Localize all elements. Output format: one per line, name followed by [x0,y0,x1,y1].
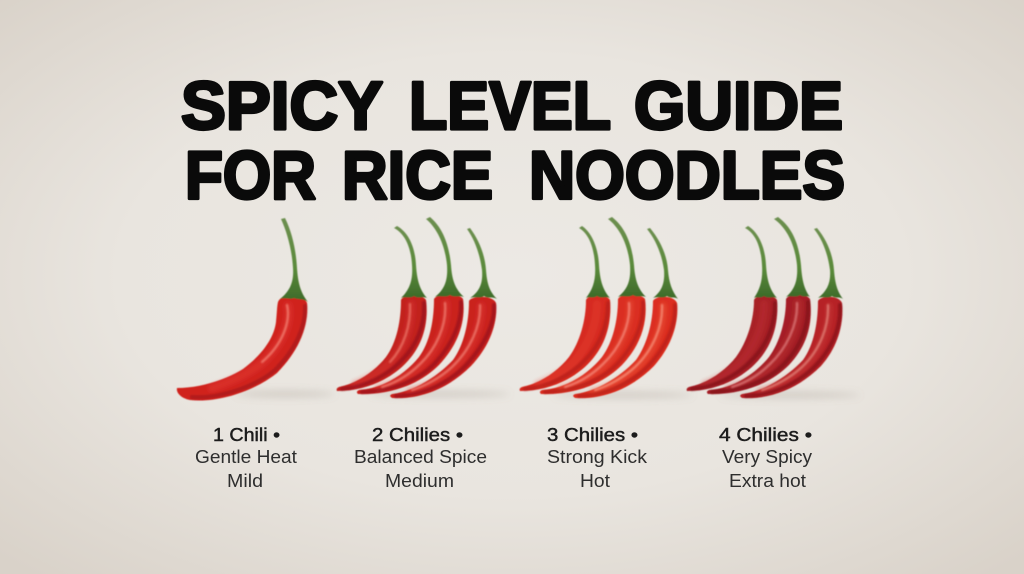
label: 2 chilies: 2 Chilies • [372,425,463,445]
chili group: 3 chilies, hot [520,217,693,398]
label: 1 chili: 1 Chili • [213,425,280,445]
chili group: 1 chili, mild [177,218,335,401]
label: 2 chilies: Balanced Spice [354,447,487,467]
label: 3 chilies: Strong Kick [547,447,648,467]
label: 1 chili [195,425,297,491]
label: 2 chilies [354,425,487,491]
label: 3 chilies: Hot [580,471,610,491]
label: 4 chilies: 4 Chilies • [719,425,812,445]
label: 3 chilies: 3 Chilies • [547,425,638,445]
title: RICE [342,138,493,214]
title: LEVEL [409,68,611,144]
label: 1 chili: Mild [227,471,263,491]
chili group: 2 chilies, medium [337,217,510,398]
title: SPICY [181,68,383,144]
title: NOODLES [529,138,845,214]
label: 1 chili: Gentle Heat [195,447,297,467]
chili group: 4 chilies, extra hot [687,217,860,398]
title: FOR [185,138,316,214]
label: 3 chilies [547,425,648,491]
title [181,68,845,214]
label: 4 chilies [719,425,812,491]
title: GUIDE [634,68,843,144]
label: 4 chilies: Very Spicy [722,447,812,467]
label: 4 chilies: Extra hot [729,471,806,491]
label: 2 chilies: Medium [385,471,454,491]
